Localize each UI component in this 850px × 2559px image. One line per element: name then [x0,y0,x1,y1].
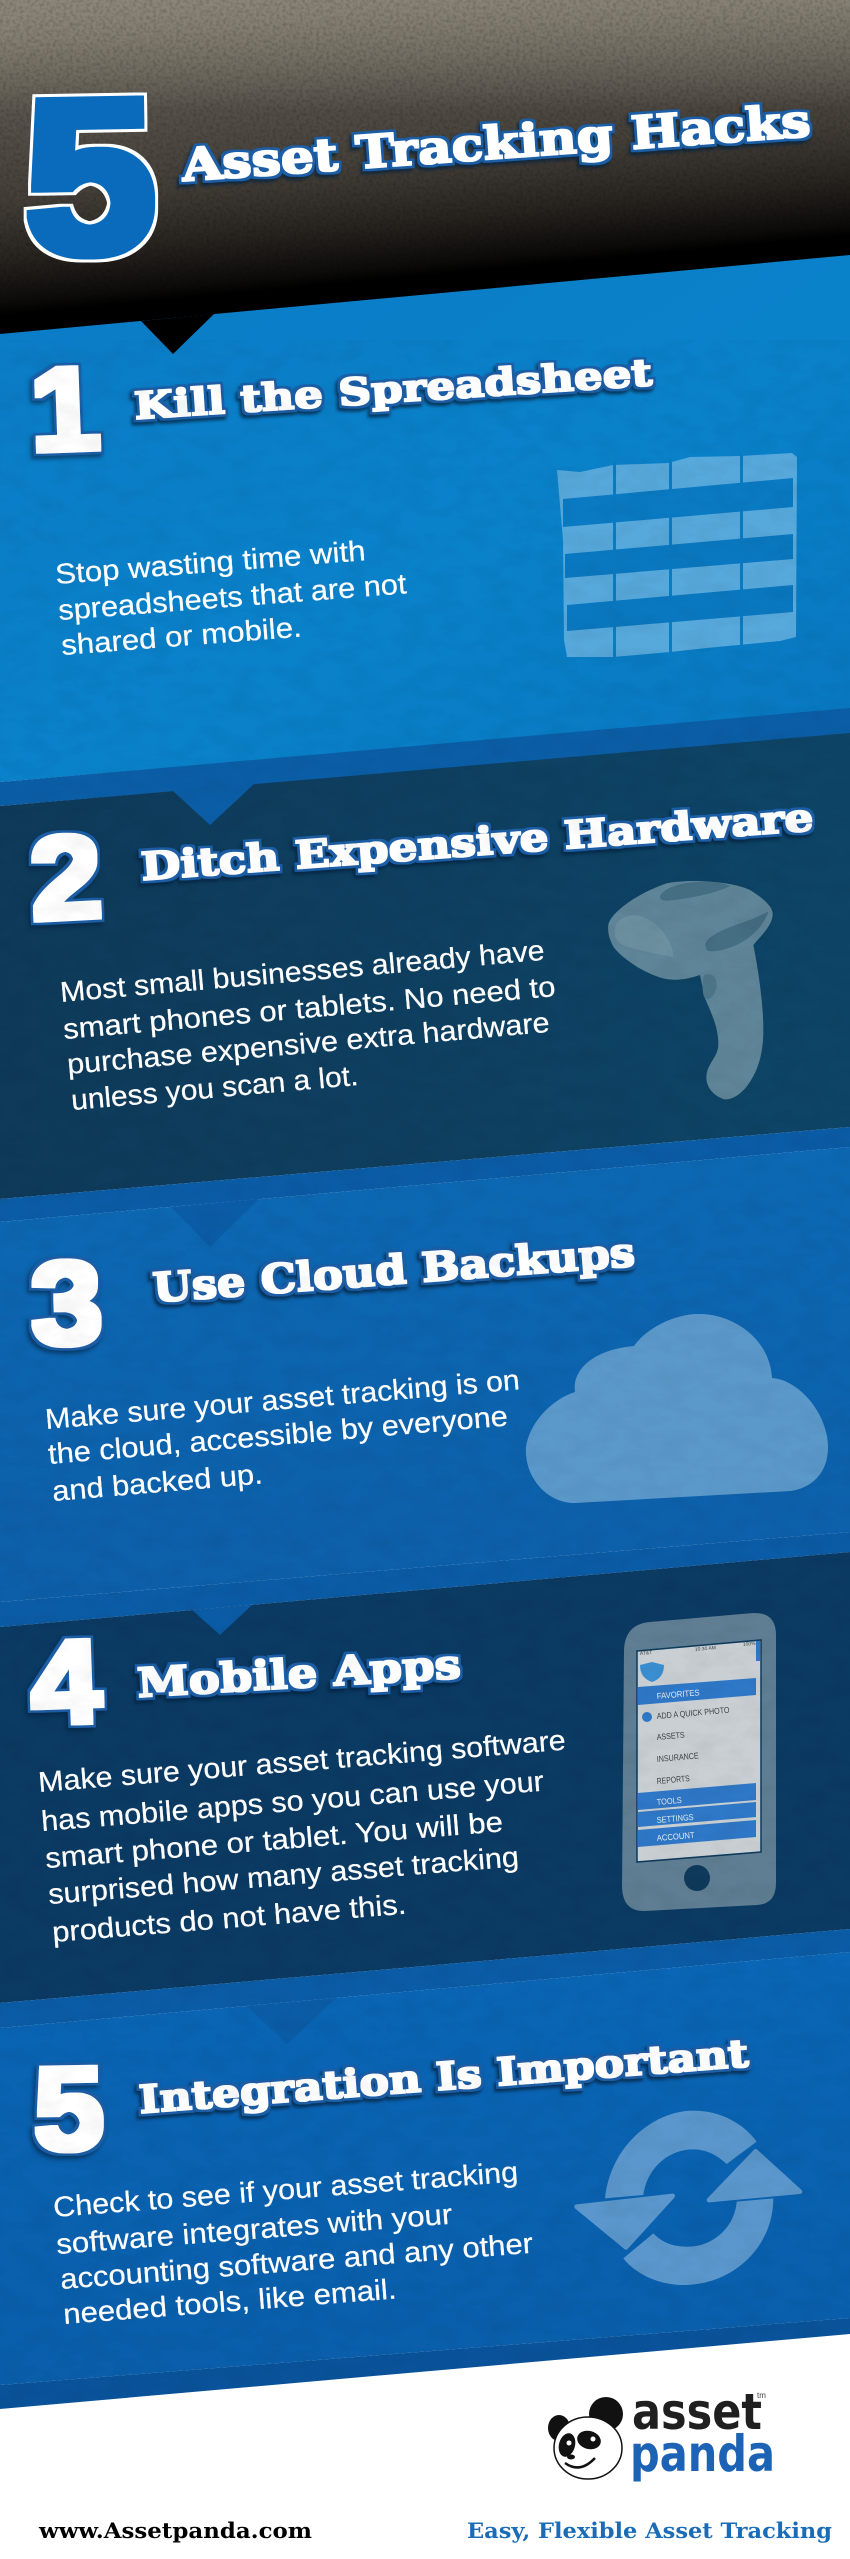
text 1: Stop wasting time with [54,535,367,591]
text 4: Make sure your asset tracking software [37,1725,567,1799]
text 5: software integrates with your [55,2199,454,2261]
pointer 2 [173,784,254,825]
panel: header [0,0,850,345]
icon: phone: INSURANCE [656,1750,699,1764]
number 2: 2 [26,811,105,946]
icon: sync arrows [577,2111,800,2285]
heading 2: Ditch Expensive Hardware [139,794,815,889]
text 4 [37,1725,567,1949]
text 5: needed tools, like email. [62,2273,398,2331]
panda icon [548,2397,623,2479]
logo: asset panda [548,2383,775,2483]
band 4 [0,1929,850,2028]
panel: 3 use cloud backups [0,1147,850,1602]
title: Asset Tracking Hacks [179,94,812,192]
band 1 [0,708,850,806]
icon: phone: FAVORITES [656,1687,700,1701]
text 4: has mobile apps so you can use your [40,1766,545,1838]
band 2 [0,1127,850,1222]
icon: barcode scanner [608,881,773,1099]
website: www.Assetpanda.com [38,2518,312,2543]
icon: phone: SETTINGS [656,1812,694,1825]
text 3: Make sure your asset tracking is on [44,1364,521,1436]
icon: phone: ASSETS [656,1730,685,1742]
icon: phone: 100% [743,1641,756,1648]
pointer 4 [192,1605,252,1635]
panel: 1 kill the spreadsheet [0,255,850,782]
text 4: surprised how many asset tracking [47,1841,520,1911]
panel: 2 ditch expensive hardware [0,733,850,1199]
text 2: unless you scan a lot. [70,1060,360,1117]
band 5 [0,2318,850,2409]
big number 5: 5 [23,55,158,300]
text 3 [44,1364,521,1508]
band 3 [0,1532,850,1627]
wordmark: tm [757,2391,766,2400]
text 3: and backed up. [51,1458,264,1508]
wordmark: panda [630,2425,775,2483]
tagline: Easy, Flexible Asset Tracking [467,2518,832,2543]
pointer 5 [247,1998,336,2044]
heading 1: Kill the Spreadsheet [133,350,653,428]
icon: phone: ACCOUNT [656,1830,695,1843]
icon: phone: ADD A QUICK PHOTO [656,1705,730,1721]
icon: phone: REPORTS [656,1773,690,1786]
panel: 5 integration is important [0,1952,850,2385]
text 2: purchase expensive extra hardware [66,1007,551,1081]
number 1: 1 [27,343,103,477]
icon: phone [622,1613,776,1911]
icon: phone: 10:30 AM [695,1645,716,1653]
number 4: 4 [28,1616,104,1750]
panel: 4 mobile apps [0,1552,850,2003]
number 3: 3 [28,1237,105,1371]
number 5: 5 [32,2043,105,2176]
text 5: accounting software and any other [59,2228,535,2296]
icon: cloud [526,1314,828,1503]
heading 5: Integration Is Important [137,2030,750,2122]
text 1 [54,535,408,662]
text 4: products do not have this. [51,1889,407,1949]
heading 4: Mobile Apps [136,1641,462,1707]
text 1: spreadsheets that are not [57,568,408,627]
text 5: Check to see if your asset tracking [52,2156,519,2224]
text 3: the cloud, accessible by everyone [47,1401,509,1471]
text 2: Most small businesses already have [59,935,546,1009]
heading 3: Use Cloud Backups [151,1229,636,1312]
text 4: smart phone or tablet. You will be [44,1806,504,1875]
wordmark: asset [632,2383,762,2441]
wordmark [630,2383,775,2483]
icon: phone: TOOLS [656,1795,682,1807]
text 5 [52,2156,535,2331]
icon: phone: AT&T [640,1650,653,1657]
pointer 1 [141,314,214,354]
text 1: shared or mobile. [60,612,303,662]
pointer 3 [171,1199,259,1247]
text 2: smart phones or tablets. No need to [62,971,557,1046]
icon: spreadsheet [557,453,797,657]
footer [38,2383,832,2543]
text 2 [59,935,557,1117]
